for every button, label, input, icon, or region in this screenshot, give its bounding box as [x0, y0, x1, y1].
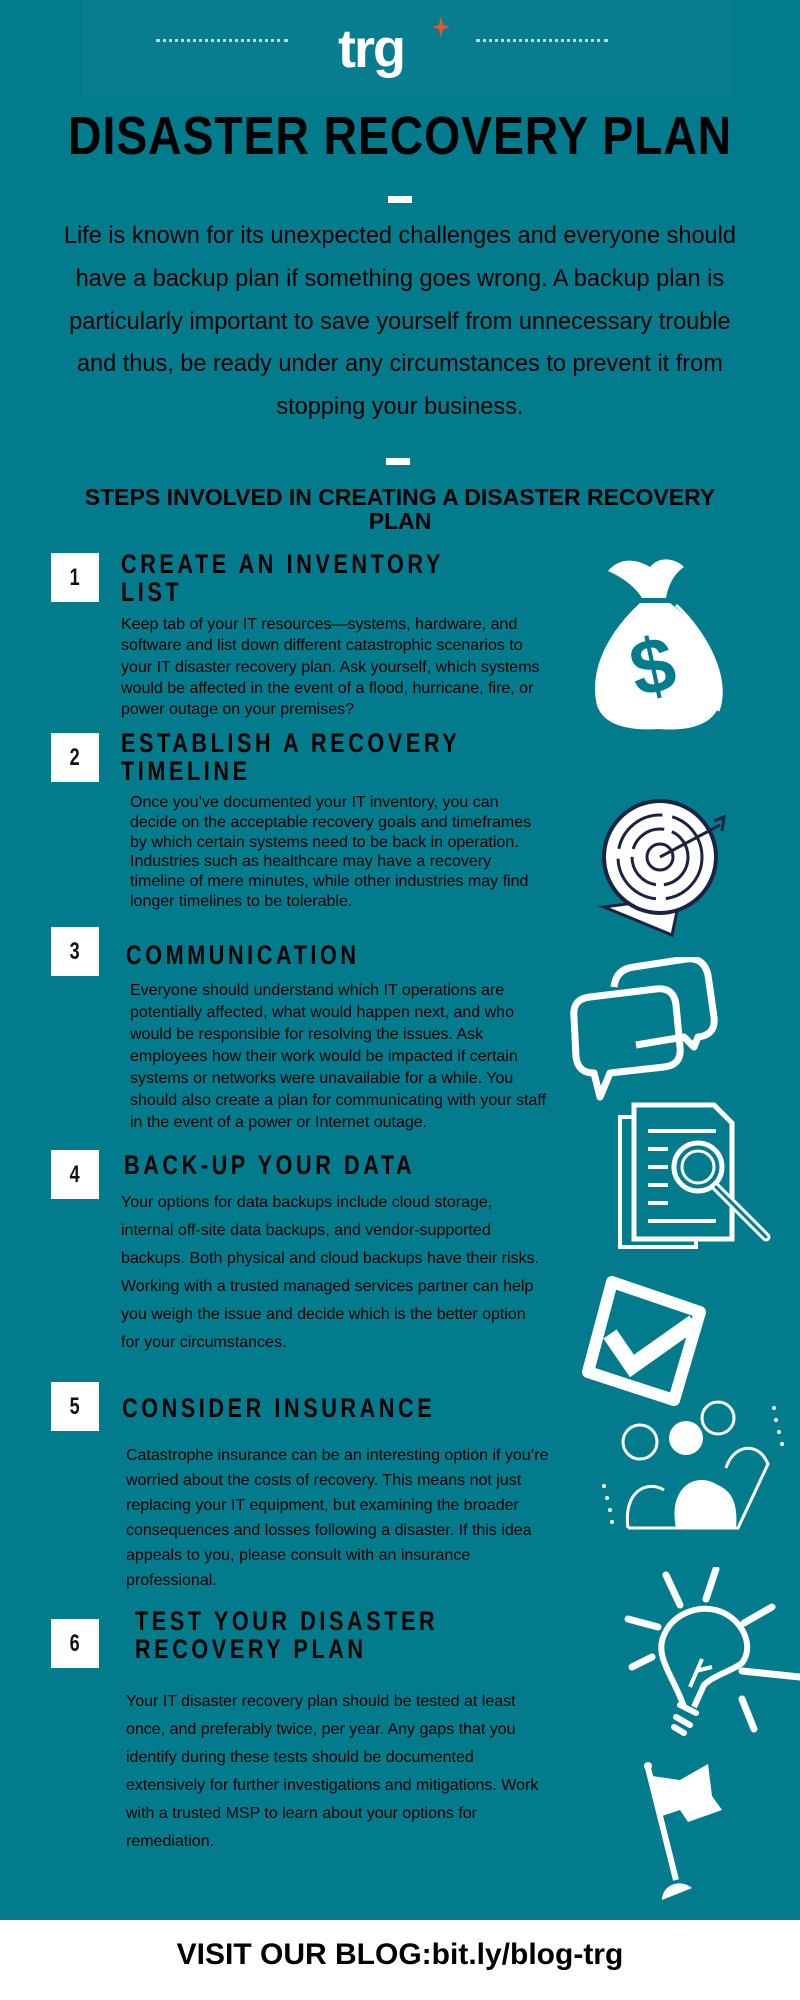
body 3: Everyone should understand which IT operations are: [130, 982, 504, 999]
body 2: Once you’ve documented your IT inventory, you can: [130, 794, 498, 811]
intro paragraph: Life is known for its unexpected challenges and everyone should: [64, 222, 736, 249]
heading 6: RECOVERY PLAN: [135, 1634, 367, 1664]
footer link text: VISIT OUR BLOG:bit.ly/blog-trg: [177, 1938, 623, 1971]
icon: light bulb: [624, 1567, 800, 1736]
number box 4: 4: [70, 1160, 80, 1188]
icon: target: [598, 799, 726, 937]
header band: [82, 0, 732, 96]
step 3: [51, 927, 546, 1131]
body 4: Working with a trusted managed services partner can help: [121, 1278, 533, 1295]
dash: [386, 458, 410, 465]
icon: document with magnifier: [618, 1102, 770, 1249]
number box 5: 5: [70, 1392, 80, 1420]
body 1: would be affected in the event of a flood, hurricane, fire, or: [121, 680, 533, 697]
icon: checkbox: [582, 1276, 706, 1406]
heading 5: CONSIDER INSURANCE: [122, 1393, 435, 1423]
number box 4: [51, 1150, 99, 1199]
body 4: for your circumstances.: [121, 1334, 286, 1351]
number box 5: [51, 1382, 99, 1431]
footer: [0, 1920, 800, 2000]
heading 2: [121, 728, 460, 786]
icon: money bag: [595, 559, 723, 730]
body 1: [121, 616, 540, 718]
body 4: internal off-site data backups, and vendor-supported: [121, 1222, 491, 1239]
step 2: [51, 728, 531, 910]
body 6: extensively for further investigations and mitigations. Work: [126, 1777, 538, 1794]
body 3: should also create a plan for communicating with your staff: [130, 1092, 546, 1109]
body 6: with a trusted MSP to learn about your options for: [126, 1805, 477, 1822]
body 2: decide on the acceptable recovery goals and timeframes: [130, 814, 531, 831]
subtitle: [85, 484, 715, 534]
intro paragraph: particularly important to save yourself from unnecessary trouble: [69, 308, 731, 335]
step 1: [51, 549, 540, 718]
icon: speech bubbles: [570, 957, 718, 1100]
title: DISASTER RECOVERY PLAN: [68, 106, 732, 166]
body 2: timeline of mere minutes, while other industries may find: [130, 873, 528, 890]
body 2: by which certain systems need to be back in operation.: [130, 834, 519, 851]
body 3: would be responsible for resolving the issues. Ask: [130, 1026, 483, 1043]
body 3: employees how their work would be impacted if certain: [130, 1048, 518, 1065]
icon: people: [602, 1400, 784, 1530]
number box 2: 2: [70, 744, 80, 770]
body 3: in the event of a power or Internet outage.: [130, 1114, 427, 1131]
body 2: [130, 794, 531, 910]
body 1: software and list down different catastrophic scenarios to: [121, 637, 523, 654]
body 5: replacing your IT equipment, but examining the broader: [126, 1497, 519, 1514]
body 5: appeals to you, please consult with an insurance: [126, 1547, 470, 1564]
number box 1: [51, 553, 99, 602]
heading 2: ESTABLISH A RECOVERY: [121, 728, 460, 758]
body 4: Your options for data backups include cloud storage,: [121, 1194, 492, 1211]
body 4: you weigh the issue and decide which is the better option: [121, 1306, 526, 1323]
intro paragraph: and thus, be ready under any circumstances to prevent it from: [77, 350, 723, 377]
body 3: systems or networks were unavailable for a while. You: [130, 1070, 513, 1087]
logo: [338, 16, 450, 79]
body 1: Keep tab of your IT resources—systems, hardware, and: [121, 616, 517, 633]
body 5: professional.: [126, 1572, 217, 1589]
number box 2: [51, 733, 99, 782]
body 2: longer timelines to be tolerable.: [130, 893, 352, 910]
body 4: backups. Both physical and cloud backups have their risks.: [121, 1250, 539, 1267]
body 4: [121, 1194, 539, 1351]
logo: trg: [338, 19, 404, 79]
step 6: [51, 1606, 538, 1850]
icon: money bag: $: [622, 618, 683, 713]
intro paragraph: have a backup plan if something goes wrong. A backup plan is: [76, 265, 724, 292]
step 5: [51, 1382, 548, 1589]
logo dots left: [156, 39, 288, 42]
body 6: identify during these tests should be documented: [126, 1749, 474, 1766]
heading 1: LIST: [121, 577, 182, 607]
body 2: Industries such as healthcare may have a recovery: [130, 853, 491, 870]
step 4: [51, 1150, 539, 1351]
intro paragraph: stopping your business.: [276, 393, 524, 420]
heading 6: TEST YOUR DISASTER: [135, 1606, 438, 1636]
subtitle: PLAN: [369, 508, 431, 534]
body 3: [130, 982, 546, 1131]
heading 4: BACK-UP YOUR DATA: [124, 1150, 415, 1180]
body 3: potentially affected, what would happen next, and who: [130, 1004, 514, 1021]
body 1: power outage on your premises?: [121, 701, 354, 718]
body 5: [126, 1447, 548, 1589]
body 5: Catastrophe insurance can be an interesting option if you’re: [126, 1447, 548, 1464]
heading 1: CREATE AN INVENTORY: [121, 549, 444, 579]
number box 6: 6: [70, 1630, 80, 1656]
dash: [388, 196, 412, 203]
number box 6: [51, 1619, 99, 1668]
body 6: remediation.: [126, 1833, 214, 1850]
logo dots right: [476, 39, 608, 42]
body 5: worried about the costs of recovery. This means not just: [126, 1472, 521, 1489]
number box 3: 3: [70, 938, 80, 964]
body 6: Your IT disaster recovery plan should be tested at least: [126, 1693, 516, 1710]
icon: flag: [644, 1762, 722, 1900]
body 5: consequences and losses following a disaster. If this idea: [126, 1522, 532, 1539]
heading 6: [135, 1606, 438, 1664]
heading 3: COMMUNICATION: [126, 940, 360, 970]
heading 2: TIMELINE: [121, 756, 251, 786]
body 1: your IT disaster recovery plan. Ask yourself, which systems: [121, 659, 540, 676]
intro paragraph: [64, 222, 736, 420]
number box 3: [51, 927, 99, 976]
body 6: once, and preferably twice, per year. Any gaps that you: [126, 1721, 516, 1738]
heading 1: [121, 549, 444, 607]
body 6: [126, 1693, 538, 1850]
subtitle: STEPS INVOLVED IN CREATING A DISASTER RECOVERY: [85, 484, 715, 510]
number box 1: 1: [70, 564, 80, 590]
